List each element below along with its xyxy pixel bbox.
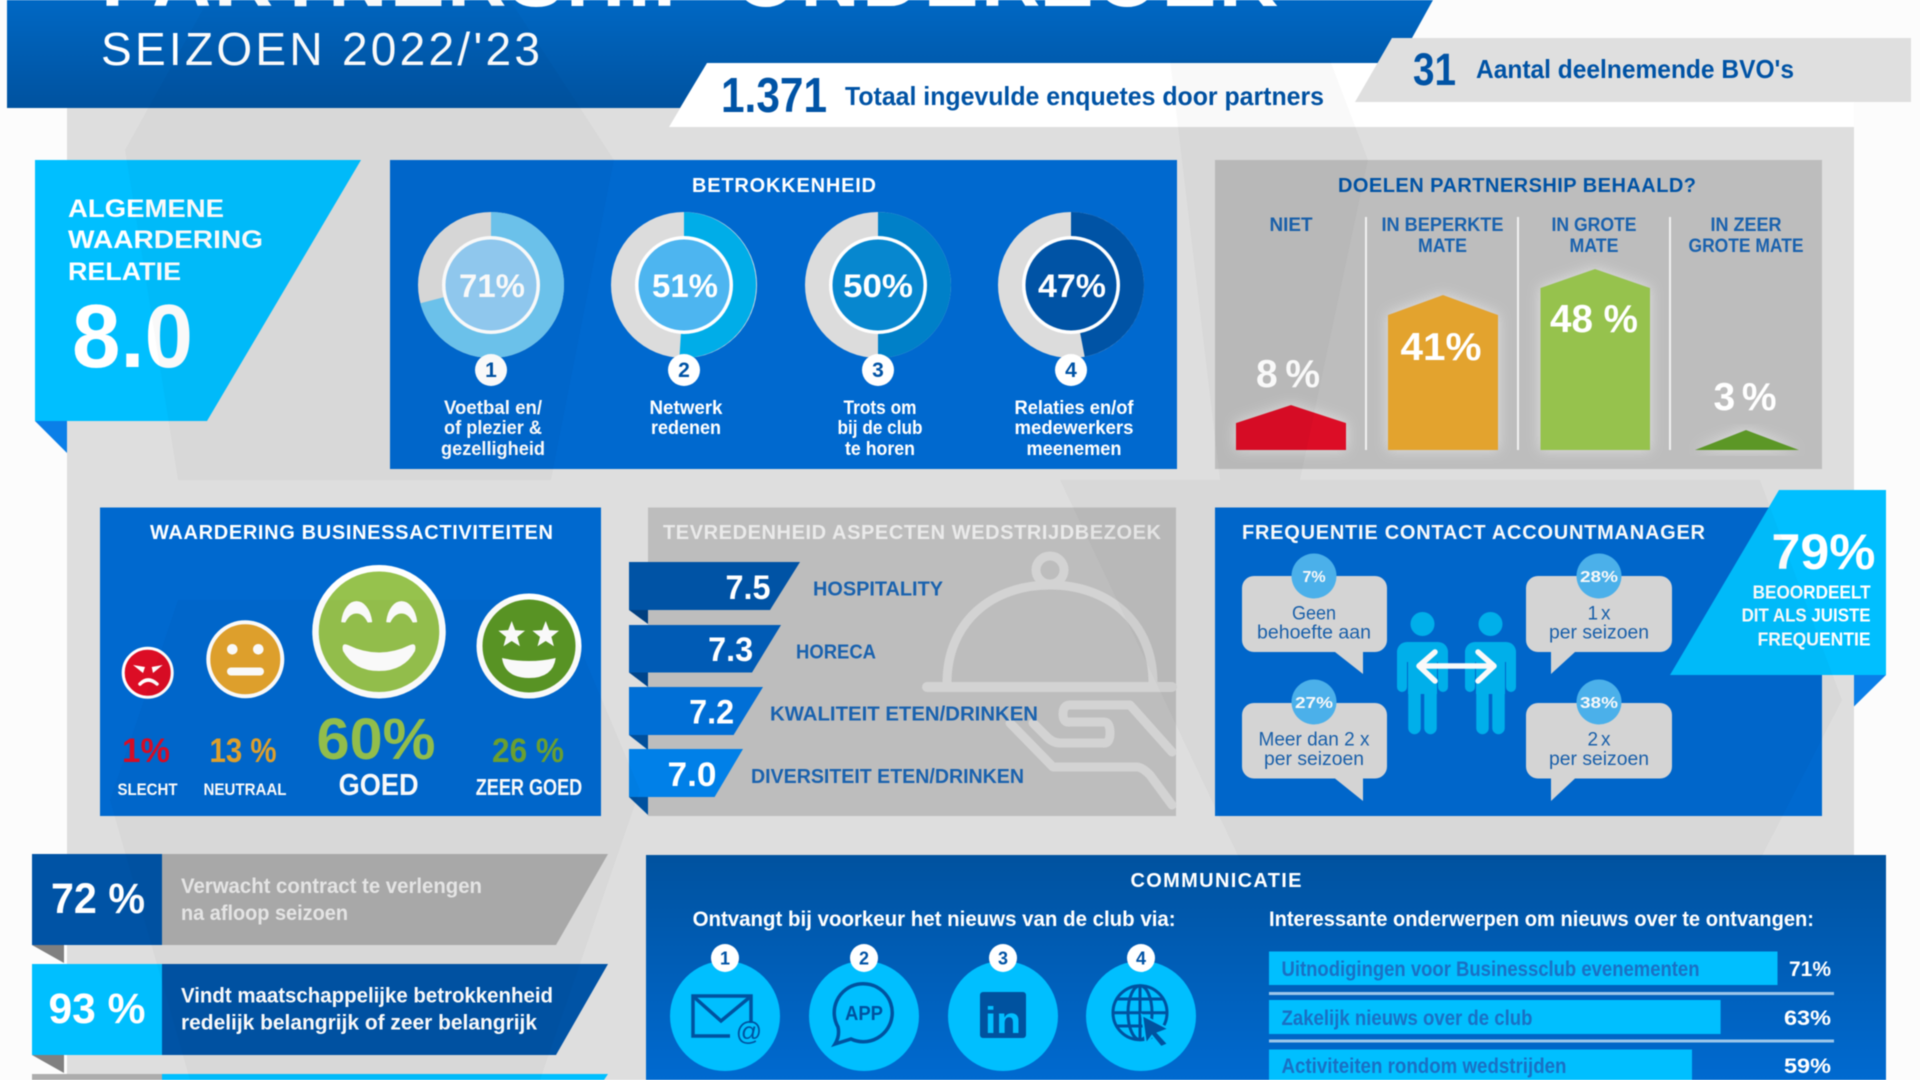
ribbon: diversiteit eten/drinken: DIVERSITEIT ETEN/DRINKEN <box>751 765 1024 788</box>
donut 2 label <box>650 397 723 439</box>
icon: linkedin: 3 <box>998 948 1008 968</box>
subheading: voorkeur: Ontvangt bij voorkeur het nieuws van de club via: <box>693 908 1176 931</box>
heading: frequentie: FREQUENTIE CONTACT ACCOUNTMANAGER <box>1242 522 1706 544</box>
value: goed: GOED <box>339 767 419 802</box>
column labels <box>1270 214 1804 257</box>
icon: email: 1 <box>720 948 730 968</box>
donut 2: 51%: 2 <box>678 359 690 382</box>
donut 1 label: gezelligheid <box>441 438 545 460</box>
ribbon: horeca: HORECA <box>796 640 876 664</box>
label: surveys: Totaal ingevulde enquetes door partners <box>845 81 1324 111</box>
chip: total surveys <box>669 63 1854 127</box>
callout: 79% juiste frequentie <box>1670 490 1886 706</box>
speech bubble: geen behoefte aan: 7% <box>1302 569 1326 586</box>
donut 3 label <box>838 397 923 460</box>
speech bubble: meer dan 2 x per seizoen: Meer dan 2 x <box>1258 730 1370 750</box>
column labels: MATE <box>1570 235 1618 257</box>
icon: linkedin: in <box>985 1000 1021 1041</box>
stat bar: 93% maatschappelijke betrokkenheid: 93 % <box>48 985 146 1033</box>
donut 1: 71% <box>418 212 564 386</box>
donut 3: 50%: 3 <box>872 359 884 382</box>
bar: businessclub evenementen 71%: Uitnodigingen voor Businessclub evenementen <box>1282 958 1700 981</box>
ribbon: diversiteit eten/drinken <box>629 749 1024 815</box>
column labels: IN BEPERKTE <box>1382 214 1504 236</box>
bar: in zeer grote mate 3%: 3 % <box>1714 376 1776 419</box>
bar: in grote mate 48%: 48 % <box>1550 298 1638 341</box>
speech bubble: 1 x per seizoen: 1 x <box>1588 604 1611 624</box>
icon: email: @ <box>736 1016 762 1046</box>
speech bubble: geen behoefte aan: Geen <box>1292 604 1336 624</box>
callout: 79% juiste frequentie: FREQUENTIE <box>1758 628 1871 650</box>
stat bar: third, cut off <box>32 1074 608 1080</box>
column labels: IN ZEER <box>1710 214 1782 236</box>
column labels: GROTE MATE <box>1688 235 1804 257</box>
heading: algemene waardering relatie: ALGEMENE <box>68 195 224 223</box>
bar: zakelijk nieuws 63% <box>1269 1000 1831 1034</box>
speech bubble: meer dan 2 x per seizoen: per seizoen <box>1264 749 1364 770</box>
value: zeer goed <box>476 732 582 800</box>
value: neutraal: NEUTRAAL <box>204 781 286 799</box>
value: neutraal <box>204 732 286 799</box>
icon: website <box>1086 944 1196 1071</box>
donut 4 label: medewerkers <box>1014 417 1134 439</box>
column labels: NIET <box>1270 214 1313 236</box>
icon: star-eyed face <box>480 596 578 696</box>
heading: algemene waardering relatie: WAARDERING <box>68 226 263 254</box>
donut 3: 50%: 50% <box>843 268 913 304</box>
value: goed: 60% <box>316 707 436 772</box>
speech bubble: 1 x per seizoen: per seizoen <box>1549 622 1649 644</box>
score 8.0: 8.0 <box>72 287 193 387</box>
donut 4 label <box>1014 397 1134 460</box>
bar: niet 8%: 8 % <box>1256 353 1320 396</box>
speech bubble: 1 x per seizoen: 28% <box>1580 569 1618 586</box>
value: slecht <box>118 732 178 799</box>
value: neutraal: 13 % <box>210 732 276 770</box>
icon: smiling face <box>316 568 442 695</box>
bar: in beperkte mate 41%: 41% <box>1400 326 1482 369</box>
ribbon: hospitality <box>629 562 943 624</box>
subheading: onderwerpen: Interessante onderwerpen om nieuws over te ontvangen: <box>1269 908 1814 931</box>
panel: doelen partnership behaald <box>1215 160 1822 469</box>
donut 2: 51%: 51% <box>652 268 718 304</box>
number: 1.371: 1.371 <box>721 69 827 123</box>
ribbon: horeca <box>629 625 876 687</box>
panel: betrokkenheid <box>390 160 1177 469</box>
icon: angry face <box>123 648 172 697</box>
speech bubble: 2 x per seizoen: 2 x <box>1588 730 1611 750</box>
speech bubble: meer dan 2 x per seizoen: 27% <box>1295 695 1333 712</box>
value: zeer goed: ZEER GOED <box>476 774 582 800</box>
stat bar: 93% maatschappelijke betrokkenheid <box>32 964 608 1073</box>
callout: 79% juiste frequentie: DIT ALS JUISTE <box>1742 604 1871 626</box>
stat bar: 72% contract verlengen: 72 % <box>51 875 145 923</box>
chip: participating clubs <box>1355 38 1911 102</box>
stat bar: 72% contract verlengen <box>32 854 608 963</box>
icon: website: 4 <box>1136 948 1146 968</box>
stat bar: 93% maatschappelijke betrokkenheid: redelijk belangrijk of zeer belangrijk <box>181 1012 537 1034</box>
panel: waardering businessactiviteiten <box>100 508 601 816</box>
donut 2 label: redenen <box>651 417 721 439</box>
ribbon: kwaliteit eten/drinken: KWALITEIT ETEN/DRINKEN <box>770 702 1038 726</box>
bar: businessclub evenementen 71% <box>1269 952 1831 985</box>
speech bubble: 1 x per seizoen <box>1526 554 1672 674</box>
stat bar: 72% contract verlengen: na afloop seizoen <box>181 902 348 925</box>
icon: app: 2 <box>859 948 869 968</box>
bar: activiteiten rondom wedstrijden 59%: 59% <box>1784 1055 1831 1078</box>
ribbon: hospitality: 7.5 <box>726 569 770 607</box>
icon: app: APP <box>845 1003 883 1025</box>
panel: algemene waardering <box>35 160 361 453</box>
ribbon: diversiteit eten/drinken: 7.0 <box>668 756 716 794</box>
donut 4 label: meenemen <box>1026 438 1122 460</box>
heading: communicatie: COMMUNICATIE <box>1130 870 1302 892</box>
callout: 79% juiste frequentie: 79% <box>1772 524 1876 580</box>
speech bubble: geen behoefte aan: behoefte aan <box>1257 622 1371 644</box>
bar: zakelijk nieuws 63%: 63% <box>1784 1007 1831 1030</box>
header banner <box>7 0 1433 108</box>
icon: serving cloche with hand <box>927 556 1172 805</box>
stat bar: 93% maatschappelijke betrokkenheid: Vindt maatschappelijke betrokkenheid <box>181 984 553 1008</box>
donut 3 label: Trots om <box>844 397 916 419</box>
donut 1: 71%: 1 <box>485 359 497 382</box>
bar: businessclub evenementen 71%: 71% <box>1789 958 1831 981</box>
donut 3: 50% <box>805 212 951 386</box>
donut 4: 47% <box>998 212 1144 386</box>
icon: neutral face <box>208 622 282 696</box>
ribbon: horeca: 7.3 <box>708 631 753 669</box>
bar: activiteiten rondom wedstrijden 59% <box>1269 1050 1831 1080</box>
heading: algemene waardering relatie: RELATIE <box>68 258 181 286</box>
speech bubble: 2 x per seizoen <box>1526 680 1672 801</box>
heading: betrokkenheid: BETROKKENHEID <box>692 175 876 197</box>
callout: 79% juiste frequentie: BEOORDEELT <box>1753 582 1871 602</box>
value: zeer goed: 26 % <box>492 732 564 770</box>
number: 31: 31 <box>1413 44 1456 95</box>
icon: email <box>670 944 780 1071</box>
value: slecht: 1% <box>122 732 170 770</box>
ribbon: kwaliteit eten/drinken: 7.2 <box>689 694 734 732</box>
ribbon: hospitality: HOSPITALITY <box>813 578 943 600</box>
column labels: IN GROTE <box>1552 214 1636 236</box>
heading: tevredenheid: TEVREDENHEID ASPECTEN WEDSTRIJDBEZOEK <box>663 522 1162 544</box>
panel: tevredenheid aspecten wedstrijdbezoek <box>629 508 1176 816</box>
donut 1: 71%: 71% <box>459 268 525 304</box>
speech bubble: 2 x per seizoen: 38% <box>1580 695 1618 712</box>
column labels: MATE <box>1418 235 1467 257</box>
donut 1 label <box>441 397 545 460</box>
stat bar: 72% contract verlengen: Verwacht contract te verlengen <box>181 875 482 898</box>
donut 4 label: Relaties en/of <box>1014 397 1134 419</box>
donut 3 label: te horen <box>845 438 915 460</box>
icon: two people with arrow <box>1397 612 1516 728</box>
heading: doelen: DOELEN PARTNERSHIP BEHAALD? <box>1338 175 1696 197</box>
donut 4: 47%: 47% <box>1038 268 1106 304</box>
speech bubble: meer dan 2 x per seizoen <box>1242 680 1387 801</box>
ribbon: kwaliteit eten/drinken <box>629 687 1038 750</box>
value: goed <box>316 707 436 802</box>
bar: in grote mate 48% <box>1540 269 1650 450</box>
donut 1 label: of plezier & <box>444 417 542 439</box>
bar: niet 8% <box>1236 353 1346 450</box>
heading: waardering: WAARDERING BUSINESSACTIVITEITEN <box>150 522 553 544</box>
donut 1 label: Voetbal en/ <box>444 397 543 419</box>
panel: communicatie <box>646 855 1886 1080</box>
donut 2: 51% <box>611 212 757 386</box>
speech bubble: 2 x per seizoen: per seizoen <box>1549 749 1649 770</box>
label: clubs: Aantal deelnemende BVO's <box>1476 54 1794 84</box>
bar: activiteiten rondom wedstrijden 59%: Activiteiten rondom wedstrijden <box>1282 1055 1566 1078</box>
icon: linkedin <box>948 944 1058 1071</box>
bar: in zeer grote mate 3% <box>1695 376 1799 450</box>
donut 2 label: Netwerk <box>650 397 723 419</box>
bar: zakelijk nieuws 63%: Zakelijk nieuws over de club <box>1282 1007 1532 1030</box>
panel: frequentie contact accountmanager <box>1215 508 1822 816</box>
icon: app <box>809 944 919 1071</box>
donut 4: 47%: 4 <box>1065 359 1077 382</box>
value: slecht: SLECHT <box>118 781 178 799</box>
bar: in beperkte mate 41% <box>1388 295 1498 450</box>
heading: algemene waardering relatie <box>68 195 263 286</box>
speech bubble: geen behoefte aan <box>1242 554 1387 674</box>
donut 3 label: bij de club <box>838 417 923 439</box>
subtitle: SEIZOEN 2022/'23 <box>101 23 540 75</box>
